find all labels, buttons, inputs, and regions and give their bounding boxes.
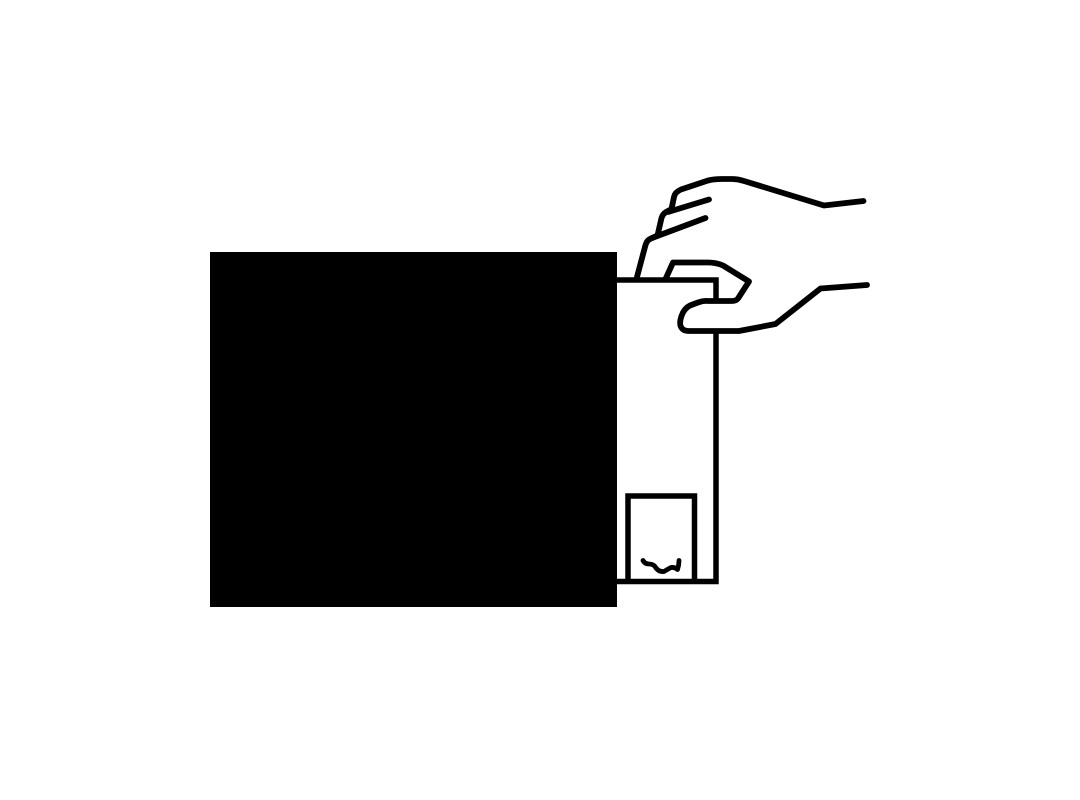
icon: hand [637,179,867,331]
panel: black sleeve [210,252,617,607]
panel: card [615,280,716,582]
small inner pocket with squiggle [628,496,694,581]
